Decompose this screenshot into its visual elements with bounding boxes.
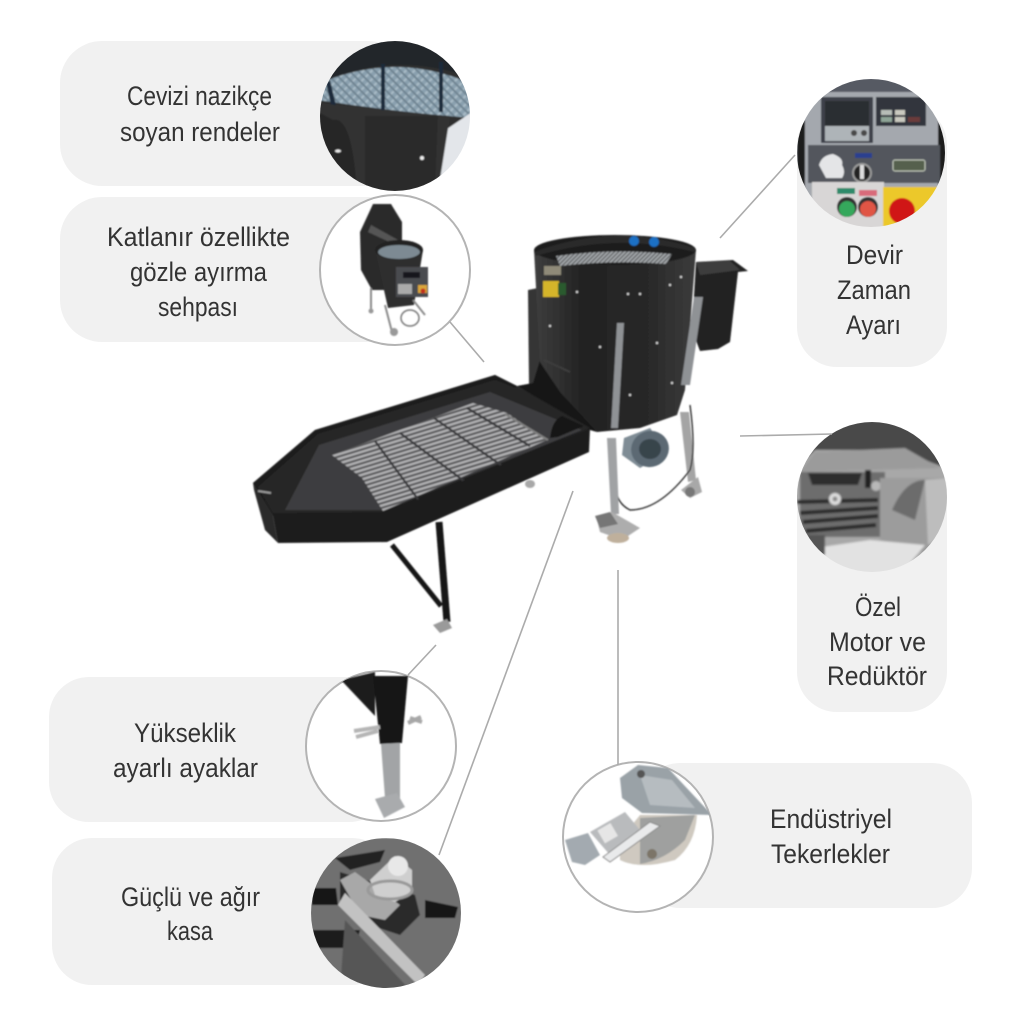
grate bars — [375, 408, 530, 502]
label — [827, 592, 927, 691]
photo: folded machine — [360, 204, 428, 336]
drum — [534, 235, 696, 432]
panel background — [797, 450, 947, 712]
latch — [258, 491, 271, 493]
label: sehpası — [158, 292, 238, 322]
photo: grater mesh — [318, 40, 472, 192]
tray floor — [285, 392, 582, 510]
panel background — [60, 197, 410, 342]
panel: special motor and reducer — [795, 420, 950, 712]
foot wheel — [433, 619, 452, 633]
grate — [332, 403, 547, 511]
label: Tekerlekler — [771, 839, 890, 869]
tray rim — [253, 375, 590, 516]
tray — [253, 375, 590, 543]
top rim — [534, 236, 695, 256]
connector lines — [408, 155, 832, 855]
panel background — [797, 105, 947, 367]
small wheel under tray — [525, 480, 535, 488]
chute — [550, 416, 584, 438]
struts — [611, 297, 703, 428]
label: Motor ve — [829, 627, 926, 657]
label: Zaman — [837, 275, 911, 305]
label: Yükseklik — [134, 718, 236, 748]
panel: speed and time setting — [795, 78, 948, 367]
label: Cevizi nazikçe — [127, 81, 272, 111]
back plate — [528, 288, 545, 385]
label — [113, 718, 258, 783]
label: Katlanır özellikte — [107, 222, 290, 252]
panel background — [640, 763, 972, 908]
photo: adjustable leg — [341, 672, 422, 818]
photo: control panel — [795, 78, 948, 230]
panel background — [49, 677, 389, 822]
front wall — [273, 428, 590, 543]
label: Güçlü ve ağır — [121, 882, 260, 912]
photo circle background — [320, 195, 470, 345]
label — [121, 882, 260, 946]
yellow warning labels — [543, 266, 566, 297]
machine — [253, 235, 748, 633]
cable — [617, 405, 693, 510]
inner mesh — [556, 251, 672, 266]
label — [770, 804, 892, 869]
label: gözle ayırma — [130, 257, 268, 287]
label — [837, 240, 911, 340]
blue caps — [629, 236, 659, 247]
label: Özel — [855, 592, 901, 622]
front leg and wheel — [595, 438, 640, 543]
panel background — [52, 838, 392, 985]
panel: height-adjustable legs — [49, 671, 456, 822]
rivets — [549, 276, 682, 396]
bracket — [544, 360, 570, 372]
tray inner wall — [253, 375, 590, 515]
photo: motor — [795, 420, 950, 575]
label — [120, 81, 280, 147]
tray support legs — [392, 522, 447, 622]
panel: peeling graters — [60, 40, 472, 192]
photo circle background — [563, 762, 713, 912]
chute neck — [517, 360, 597, 432]
label: Endüstriyel — [770, 804, 892, 834]
motor — [622, 426, 674, 472]
label: ayarlı ayaklar — [113, 753, 258, 783]
label: Redüktör — [827, 661, 927, 691]
rear leg and wheel — [680, 412, 702, 498]
label: soyan rendeler — [120, 117, 280, 147]
label: Ayarı — [846, 310, 901, 340]
hopper box — [692, 260, 748, 351]
label: Devir — [846, 240, 903, 270]
label: kasa — [167, 916, 214, 946]
panel background — [60, 41, 410, 186]
panel: industrial wheels — [563, 762, 972, 912]
photo: bolt on frame — [310, 838, 462, 990]
photo: caster wheel — [565, 765, 712, 865]
photo circle background — [306, 671, 456, 821]
label — [107, 222, 290, 322]
panel: foldable sorting stand — [60, 195, 470, 345]
panel: strong heavy frame — [52, 838, 462, 990]
side wall — [253, 483, 278, 543]
